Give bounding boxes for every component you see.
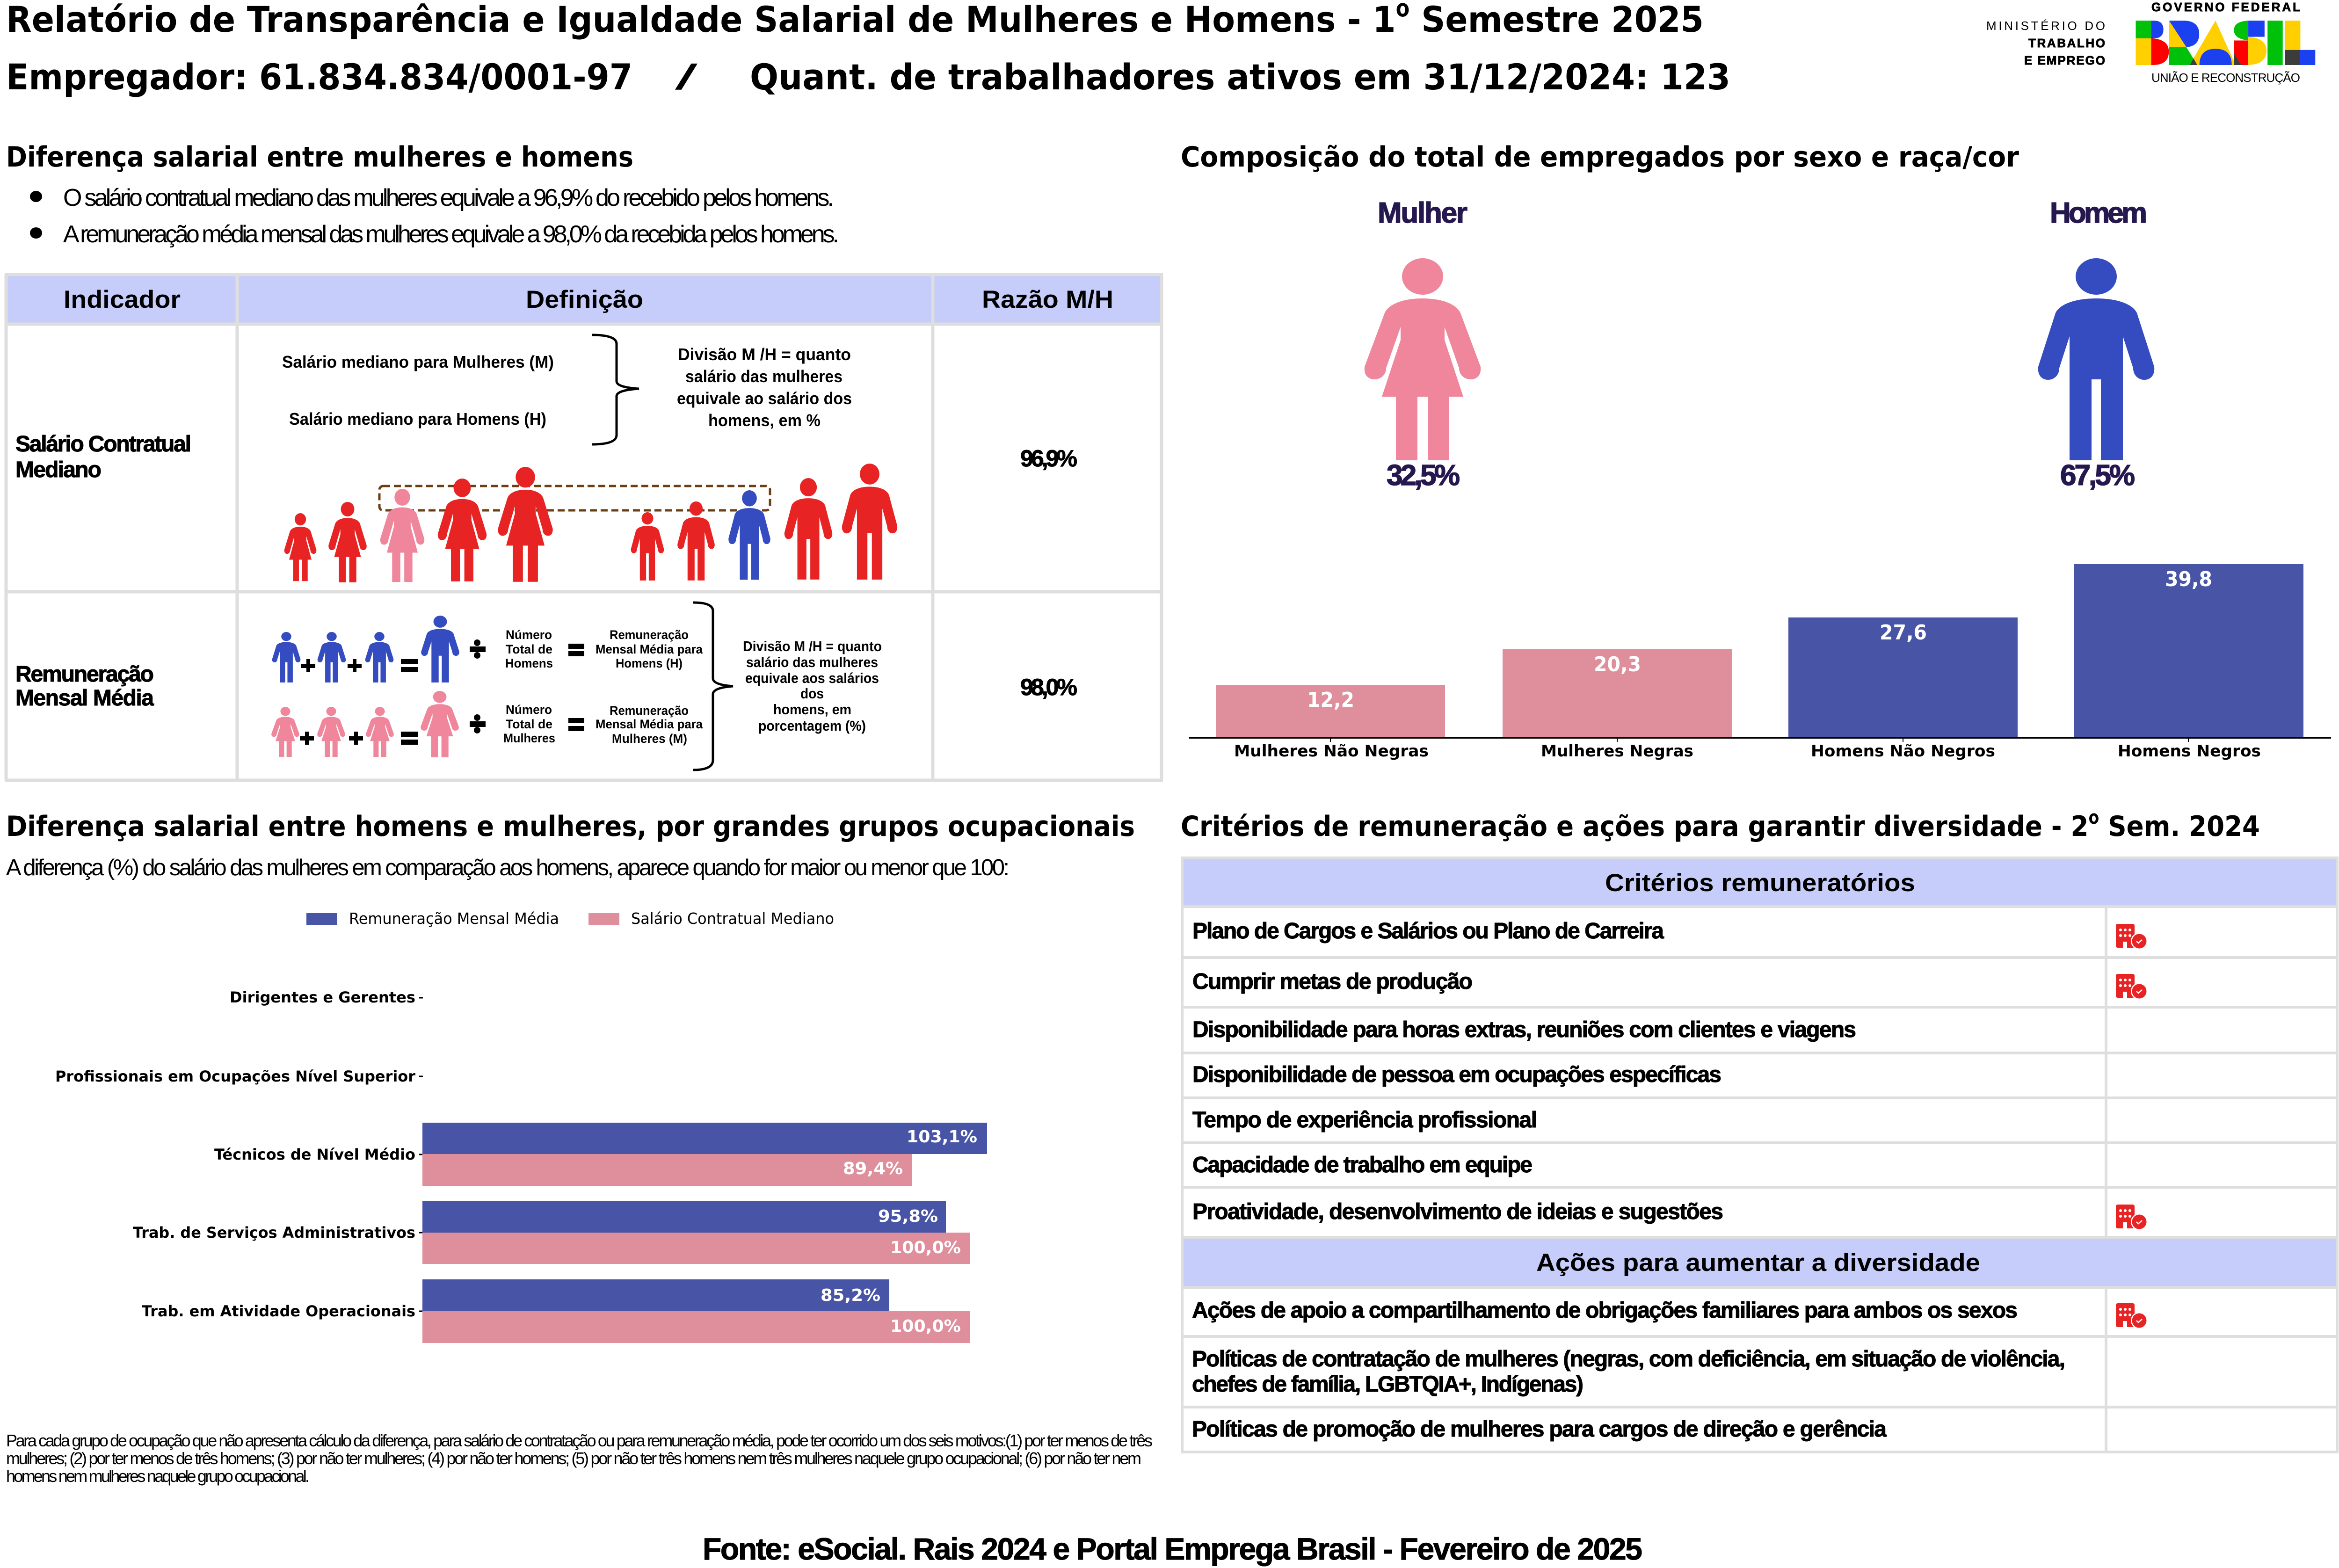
employer line: Quant. de trabalhadores ativos em 31/12/2024: 123 (750, 56, 1730, 98)
title (6, 0, 1730, 98)
table heading: ações: Ações para aumentar a diversidade (1536, 1249, 1980, 1277)
women equation: Total de (506, 717, 552, 731)
row label: salário contratual: Salário Contratual (15, 432, 191, 457)
category labels: Dirigentes e Gerentes (230, 988, 415, 1006)
bar chart: grupos ocupacionais: 103,1% (907, 1127, 977, 1147)
definition text: salário mediano (282, 352, 554, 428)
panel: homem (2038, 197, 2154, 492)
employer line: Empregador: 61.834.834/0001-97 (6, 56, 632, 98)
definition text: divisão 1 (677, 345, 852, 430)
bar chart: composição: 27,6 (1880, 621, 1927, 645)
table header: Indicador (64, 286, 181, 313)
subtitle: A diferença (%) do salário das mulheres em comparação aos homens, aparece quando for maior ou menor que 100: (6, 855, 1010, 880)
bar chart: composição (1189, 564, 2331, 761)
row label: salário contratual: Mediano (15, 457, 102, 482)
value: 96,9%: 96,9% (1020, 445, 1077, 472)
table heading: critérios remuneratórios: Critérios remuneratórios (1605, 869, 1915, 897)
men equation (272, 616, 703, 682)
criteria rows: Cumprir metas de produção (1192, 969, 1473, 994)
definition text: divisão 1: homens, em % (708, 411, 821, 430)
bar chart: composição: 12,2 (1307, 688, 1354, 712)
definition text: divisão 2 (743, 638, 882, 734)
category labels: Profissionais em Ocupações Nível Superior (55, 1067, 415, 1085)
women equation: Mulheres (M) (612, 732, 687, 746)
bar chart: composição: Homens Negros (2118, 742, 2261, 761)
definition text: divisão 1: salário das mulheres (685, 367, 843, 386)
criteria rows: Disponibilidade de pessoa em ocupações específicas (1192, 1062, 1722, 1087)
criteria rows: Capacidade de trabalho em equipe (1192, 1153, 1533, 1177)
bar chart: composição: 39,8 (2165, 567, 2212, 591)
definition text: salário mediano: Salário mediano para Homens (H) (289, 409, 546, 428)
bar chart: grupos ocupacionais: 100,0% (890, 1238, 961, 1257)
men equation: Número (506, 628, 552, 642)
women equation: Remuneração (610, 704, 689, 718)
row label: remuneração (15, 662, 154, 711)
criteria rows: Tempo de experiência profissional (1192, 1108, 1537, 1132)
definition text: divisão 1: equivale ao salário dos (677, 389, 852, 408)
bar chart: grupos ocupacionais: 85,2% (821, 1286, 880, 1305)
category labels: Técnicos de Nível Médio (214, 1146, 415, 1163)
men equation: Mensal Média para (596, 642, 703, 656)
criteria rows: Disponibilidade para horas extras, reuniões com clientes e viagens (1192, 1017, 1856, 1042)
panel: mulher: Mulher (1378, 197, 1467, 229)
women equation (271, 691, 703, 757)
footnote (6, 1431, 1153, 1486)
panel: indicator table (5, 275, 1163, 780)
men figures row 1 (631, 464, 897, 581)
brace 1 (592, 335, 639, 444)
icon: company check 1 (2116, 924, 2148, 950)
bullet list: A remuneração média mensal das mulheres equivale a 98,0% da recebida pelos homens. (63, 221, 839, 248)
brace 2 (693, 603, 733, 770)
definition text: divisão 2: dos (800, 685, 824, 702)
bullet list (30, 184, 839, 248)
bar chart: grupos ocupacionais: 95,8% (878, 1207, 938, 1226)
criteria rows: Plano de Cargos e Salários ou Plano de Carreira (1192, 919, 1664, 944)
icon: company check 3 (2116, 1205, 2148, 1230)
definition text: divisão 1: Divisão M /H = quanto (678, 345, 851, 364)
source line: Fonte: eSocial. Rais 2024 e Portal Emprega Brasil - Fevereiro de 2025 (703, 1532, 1642, 1566)
icon: company check 2 (2116, 974, 2148, 1000)
bar chart: composição: Mulheres Não Negras (1234, 742, 1429, 761)
footnote: Para cada grupo de ocupação que não apresenta cálculo da diferença, para salário de contratação ou para remuneração média, pode ter ocorrido um dos seis motivos:(1) por ter menos de três (6, 1431, 1153, 1450)
action rows (1192, 1298, 2065, 1442)
category labels: Trab. em Atividade Operacionais (142, 1302, 415, 1320)
panel: mulher (1365, 197, 1481, 492)
women equation: Número (506, 703, 552, 717)
women equation: Mulheres (503, 731, 555, 745)
category labels: Trab. de Serviços Administrativos (133, 1224, 415, 1241)
logo: ministério: MINISTÉRIO DO (1986, 19, 2105, 33)
action rows: Ações de apoio a compartilhamento de obrigações familiares para ambos os sexos (1192, 1298, 2018, 1323)
chart legend: Salário Contratual Mediano (631, 909, 834, 928)
logo: ministério (1986, 19, 2105, 67)
dashed highlight (379, 486, 770, 510)
definition text: divisão 2: homens, em (773, 701, 851, 718)
row label: salário contratual (15, 432, 191, 482)
value: 98,0%: 98,0% (1020, 674, 1077, 700)
action rows: Políticas de contratação de mulheres (negras, com deficiência, em situação de violência, (1192, 1347, 2065, 1372)
panel: mulher: 32,5% (1387, 459, 1460, 492)
chart legend: Remuneração Mensal Média (349, 909, 559, 928)
action rows: Políticas de promoção de mulheres para cargos de direção e gerência (1192, 1417, 1887, 1442)
logo: ministério: TRABALHO (2028, 36, 2105, 50)
men equation: Homens (505, 656, 553, 670)
definition text: divisão 2: equivale aos salários (745, 670, 879, 686)
row label: remuneração: Mensal Média (15, 686, 154, 711)
criteria rows: Proatividade, desenvolvimento de ideias e sugestões (1192, 1199, 1723, 1224)
table header: Definição (526, 286, 643, 313)
definition text: divisão 2: porcentagem (%) (758, 718, 866, 734)
heading: grupos ocupacionais: Diferença salarial entre homens e mulheres, por grandes grupos ocupacionais (6, 810, 1135, 843)
table header (64, 286, 1113, 313)
logo: governo federal brasil: GOVERNO FEDERAL (2151, 0, 2300, 14)
employer line (6, 56, 1730, 98)
action rows: chefes de família, LGBTQIA+, Indígenas) (1192, 1372, 1584, 1397)
women equation: Mensal Média para (596, 717, 703, 731)
logo: governo federal brasil: UNIÃO E RECONSTRUÇÃO (2151, 71, 2300, 85)
bar chart: composição: Mulheres Negras (1541, 742, 1693, 761)
panel: homem: Homem (2050, 197, 2147, 229)
definition text: salário mediano: Salário mediano para Mulheres (M) (282, 352, 554, 371)
definition text: divisão 2: Divisão M /H = quanto (743, 638, 882, 654)
table header: Razão M/H (982, 286, 1113, 313)
bar chart: grupos ocupacionais: 89,4% (843, 1159, 903, 1178)
bar chart: grupos ocupacionais (55, 988, 987, 1343)
panel: homem: 67,5% (2060, 459, 2135, 492)
bullet list: O salário contratual mediano das mulheres equivale a 96,9% do recebido pelos homens. (63, 184, 834, 211)
bar chart: composição: 20,3 (1594, 653, 1641, 676)
criteria rows (1192, 919, 1856, 1224)
panel: critérios table (1181, 857, 2339, 1453)
footnote: mulheres; (2) por ter menos de três homens; (3) por não ter mulheres; (4) por não ter homens; (5) por não ter três homens nem três mulheres naquele grupo ocupacional; (6) por não ter nem (6, 1449, 1141, 1468)
men equation: Remuneração (610, 628, 689, 642)
icon: company check 4 (2116, 1303, 2148, 1329)
bar chart: grupos ocupacionais: 100,0% (890, 1317, 961, 1336)
footnote: homens nem mulheres naquele grupo ocupacional. (6, 1466, 310, 1486)
category labels (55, 988, 415, 1320)
chart legend (306, 909, 834, 928)
men equation: Total de (506, 642, 552, 656)
heading: critérios: Critérios de remuneração e ações para garantir diversidade - 2º Sem. 2024 (1181, 804, 2260, 844)
women figures row 1 (284, 467, 553, 582)
heading: diferença salarial: Diferença salarial entre mulheres e homens (6, 141, 633, 174)
employer line: / (675, 58, 698, 97)
row label: remuneração: Remuneração (15, 662, 154, 687)
men equation: Homens (H) (616, 656, 683, 670)
logo: governo federal brasil (2136, 0, 2315, 85)
heading: composição: Composição do total de empregados por sexo e raça/cor (1181, 141, 2019, 174)
logo: ministério: E EMPREGO (2024, 53, 2105, 67)
definition text: divisão 2: salário das mulheres (746, 654, 878, 670)
bar chart: composição: Homens Não Negros (1811, 742, 1995, 761)
